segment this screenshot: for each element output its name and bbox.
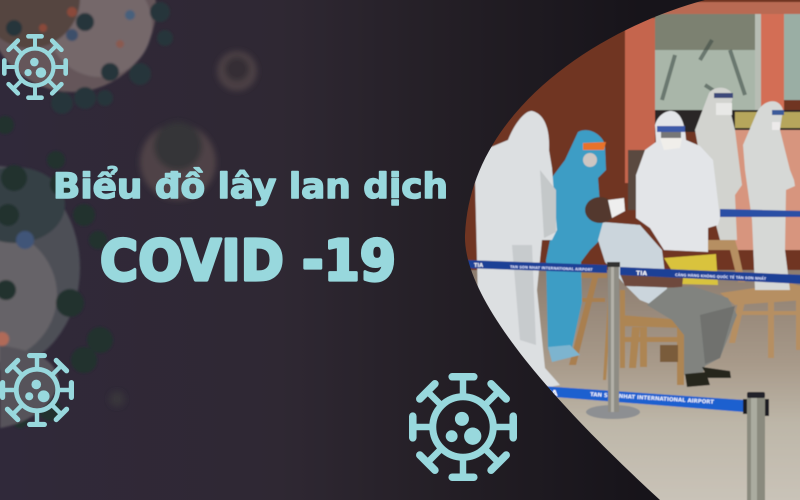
title line 1: Biểu đồ lây lan dịch [53, 165, 448, 207]
frosted window [655, 14, 761, 112]
upper right barrier strap: CẢNG HÀNG KHÔNG QUỐC TẾ TÂN SƠN NHẤT [675, 271, 767, 281]
upper right barrier strap: TIA [636, 270, 647, 277]
person: seated man shirt, arms and head [585, 197, 683, 312]
upper left barrier strap: TIA [474, 263, 483, 269]
icon: virus bottom center [413, 377, 513, 477]
person: blue gown [546, 130, 606, 362]
title line 2: COVID -19 [100, 229, 396, 294]
lower barrier strap: TAN SON NHAT INTERNATIONAL AIRPORT [590, 392, 714, 406]
virus illustration: left side [0, 116, 113, 428]
person: white suit back view [475, 111, 560, 388]
person seated: wooden chair [603, 280, 684, 385]
barrier post front [743, 392, 769, 500]
upper left barrier strap [465, 260, 607, 273]
second window [784, 14, 800, 100]
person: white suit center front [636, 111, 720, 252]
dark counter [655, 110, 800, 132]
box under chair [660, 345, 678, 362]
upper left barrier strap: TAN SON NHAT INTERNATIONAL AIRPORT [510, 265, 593, 272]
back wall [465, 0, 800, 270]
second orange column [761, 14, 784, 114]
icon: virus top left [4, 36, 66, 98]
upper right barrier strap [620, 267, 800, 284]
person: seated man trousers and shoes [647, 286, 737, 387]
barrier post near [586, 262, 640, 419]
blurred medium virus behind title [140, 122, 216, 200]
lower barrier strap: TIA [543, 389, 558, 398]
photo: testing station at Tan Son Nhat airport [455, 0, 800, 500]
blurred tiny virus [109, 391, 125, 407]
left wooden table [567, 273, 607, 365]
upper rear barrier strap [720, 209, 800, 217]
floor [455, 270, 800, 500]
yellow bag [664, 254, 718, 285]
title [53, 165, 448, 294]
lower barrier strap [542, 386, 744, 412]
virus illustration: top left [0, 0, 173, 114]
top ceiling band [661, 2, 800, 14]
table items behind nurse [628, 150, 646, 210]
orange column [625, 18, 655, 183]
person: white suit far right [743, 101, 795, 290]
icon: virus bottom left [3, 356, 71, 424]
blurred small virus near top [217, 51, 257, 91]
right wooden chair [700, 240, 800, 358]
person: white suit back right [695, 88, 742, 240]
lower pink wall [735, 130, 800, 250]
